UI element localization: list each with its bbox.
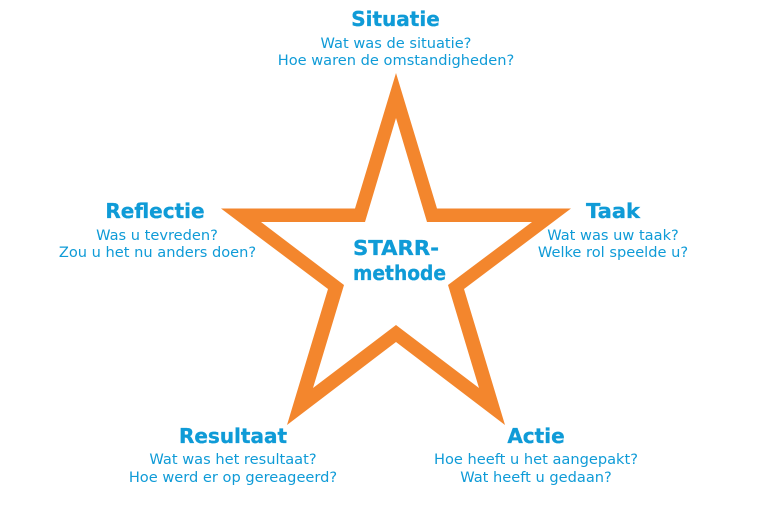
- label: Resultaat: Hoe werd er op gereageerd?: [129, 469, 337, 486]
- label: Taak: Wat was uw taak?: [547, 227, 679, 244]
- label: Situatie: Hoe waren de omstandigheden?: [278, 52, 514, 69]
- label: Reflectie: Zou u het nu anders doen?: [59, 244, 256, 261]
- label: Actie: Hoe heeft u het aangepakt?: [434, 451, 638, 468]
- label: Resultaat: [129, 424, 337, 486]
- label: Situatie: Wat was de situatie?: [321, 35, 471, 52]
- label: Resultaat: Wat was het resultaat?: [149, 451, 317, 468]
- label: Situatie: [278, 7, 514, 69]
- label: Taak: [538, 199, 688, 261]
- label: Resultaat: Resultaat: [179, 424, 287, 448]
- star outline: [221, 73, 571, 425]
- label: Taak: Welke rol speelde u?: [538, 244, 688, 261]
- label: Situatie: Situatie: [351, 7, 440, 31]
- label: Reflectie: Was u tevreden?: [96, 227, 218, 244]
- label: Actie: [434, 424, 638, 486]
- label: Actie: Wat heeft u gedaan?: [460, 469, 612, 486]
- label: Reflectie: [59, 199, 256, 261]
- label: Actie: Actie: [507, 424, 565, 448]
- center label: STARR-: [353, 236, 439, 260]
- center label: [353, 236, 446, 285]
- center label: methode: [353, 261, 446, 285]
- label: Taak: Taak: [586, 199, 641, 223]
- label: Reflectie: Reflectie: [105, 199, 205, 223]
